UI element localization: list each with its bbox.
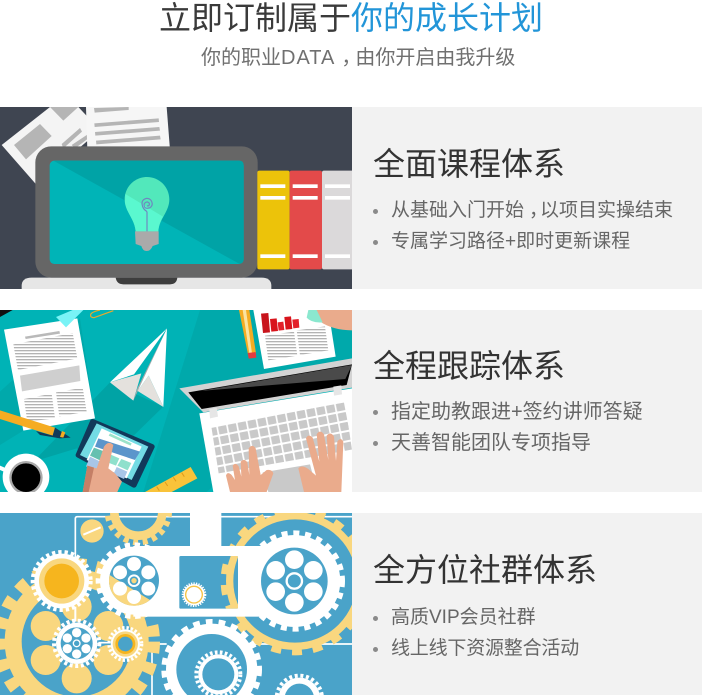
icon: coffee cup (0, 454, 49, 500)
icon: screw (80, 519, 104, 543)
icon: laptop (179, 358, 352, 492)
icon: red book (290, 171, 322, 269)
icon: typing hands (226, 432, 343, 492)
bullet 2: 专属学习路径+即时更新课程 (391, 231, 630, 252)
icon: small wheel gear (54, 607, 110, 666)
icon: right wheel gear (247, 534, 342, 628)
icon: laptop screen (35, 146, 258, 278)
panel: 全方位社群体系 (352, 513, 702, 695)
heading: 全程跟踪体系 (373, 348, 565, 384)
icon: bottom right gear (277, 676, 322, 695)
icon: tilted paper (2, 107, 100, 185)
icon: bottom big white gear (165, 622, 259, 695)
icon: top small gear (108, 481, 169, 542)
icon: upright paper (86, 107, 170, 150)
title: 立即订制属于你的成长计划 (159, 0, 543, 36)
icon: small orange ring gear (109, 628, 142, 660)
icon: paperclip (91, 310, 113, 318)
frame lines (75, 517, 352, 695)
icon: paper plane (110, 328, 167, 407)
icon: yellow center gear (33, 552, 91, 610)
icon: laptop base (22, 278, 271, 289)
bullet 1: 指定助教跟进+签约讲师答疑 (391, 401, 643, 423)
icon: large yellow gear (0, 564, 154, 695)
icon: pen (0, 410, 71, 438)
icon: center window with gears (179, 556, 238, 609)
bullet 1: 高质VIP会员社群 (391, 607, 536, 628)
icon: grey book (322, 171, 355, 269)
icon: hand top right (307, 310, 352, 330)
icon: tablet with hand (78, 422, 152, 492)
bullet 2: 线上线下资源整合活动 (391, 638, 579, 659)
white connector bar (133, 513, 267, 617)
heading: 全面课程体系 (373, 146, 565, 182)
icon: light bulb (125, 177, 169, 251)
panel: 全程跟踪体系 (352, 310, 702, 492)
heading: 全方位社群体系 (373, 552, 597, 588)
bullet 1: 从基础入门开始 以项目实操结束 (391, 200, 673, 221)
icon: left wheel gear (98, 545, 170, 617)
icon: report sheet with bar chart (253, 310, 336, 369)
bullet 2: 天善智能团队专项指导 (391, 432, 591, 454)
illustration: desk with laptop, tablet and paper plane (0, 310, 352, 492)
illustration: laptop with light bulb and books (0, 107, 352, 289)
icon: document (4, 310, 95, 431)
icon: yellow book (257, 171, 290, 269)
panel: 全面课程体系 (352, 107, 702, 289)
icon: ruler (145, 467, 197, 492)
icon: pencil (239, 310, 256, 359)
icon: top right yellow gear (224, 510, 366, 652)
subtitle: 你的职业DATA 由你开启由我升级 (201, 47, 515, 69)
illustration: gears (0, 513, 352, 695)
